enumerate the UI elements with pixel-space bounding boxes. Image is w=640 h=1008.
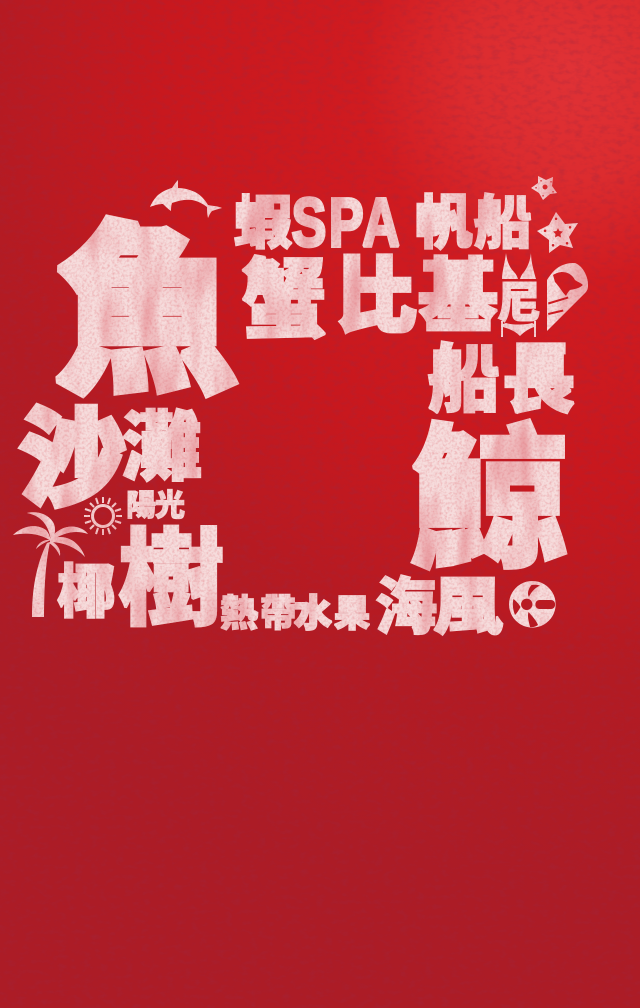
icon: small star xyxy=(531,176,557,200)
text: 光: 光 xyxy=(155,489,185,522)
text: 果: 果 xyxy=(334,593,370,634)
word cluster xyxy=(13,176,588,643)
text: 風: 風 xyxy=(433,573,503,643)
text: 長: 長 xyxy=(503,339,575,421)
icon: sun xyxy=(84,497,122,535)
text: 尼: 尼 xyxy=(498,279,540,326)
text: 沙: 沙 xyxy=(21,402,125,518)
text: 比: 比 xyxy=(336,252,416,341)
text: 椰: 椰 xyxy=(57,560,115,625)
headline glyph: 鯨: 鯨 xyxy=(411,414,567,587)
text: 樹: 樹 xyxy=(118,521,224,639)
icon: bikini top xyxy=(502,253,536,279)
text: 蝦: 蝦 xyxy=(234,191,292,256)
text: 海: 海 xyxy=(375,574,437,643)
text: 水: 水 xyxy=(294,593,333,634)
text: 熱: 熱 xyxy=(220,593,259,634)
icon: bikini bottom xyxy=(501,321,536,337)
text: 蟹: 蟹 xyxy=(242,253,326,349)
text: 灘: 灘 xyxy=(122,405,202,490)
text: 帶: 帶 xyxy=(260,593,296,634)
text: 陽: 陽 xyxy=(126,489,156,522)
icon: ice cream cone xyxy=(547,263,588,331)
icon: palm tree xyxy=(13,512,88,617)
text: 基: 基 xyxy=(418,252,498,341)
text: 船 captain: 船 xyxy=(428,339,500,421)
icon: large star xyxy=(537,212,578,253)
text: 帆: 帆 xyxy=(415,191,473,256)
text: SPA: SPA xyxy=(292,184,402,261)
text: 船: 船 xyxy=(474,191,532,256)
icon: beach ball xyxy=(509,581,556,628)
headline glyph: 魚: 魚 xyxy=(55,211,237,415)
icon: dolphin xyxy=(150,180,222,218)
